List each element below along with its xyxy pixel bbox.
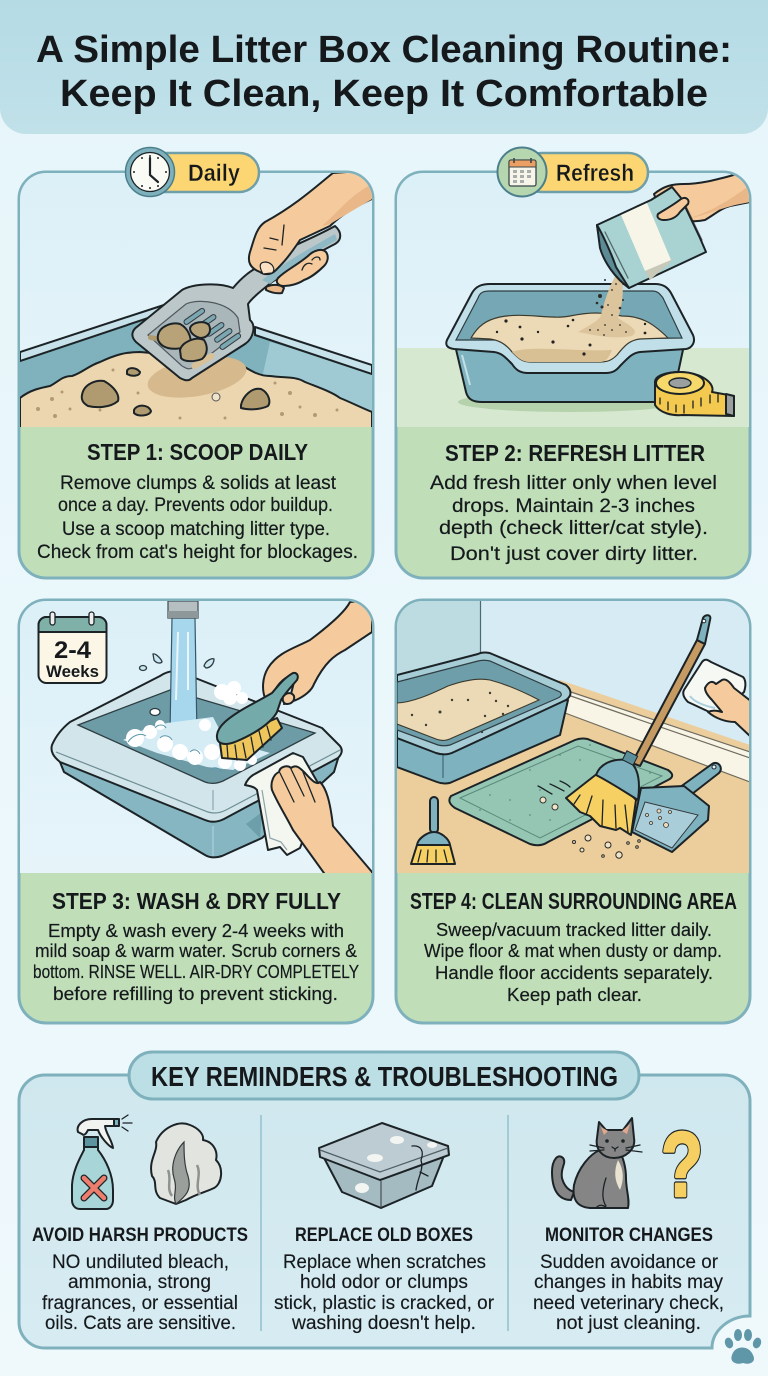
- illustration: scooping clumps from the box: [20, 170, 374, 428]
- title banner: [0, 0, 768, 134]
- badge: daily: [126, 148, 259, 196]
- panel: step 2 refresh litter: [396, 170, 750, 578]
- scoop: [132, 226, 340, 380]
- column: replace old boxes: Replace when scratches: [283, 1252, 486, 1273]
- litter box: [51, 671, 342, 857]
- step 1 text: STEP 1: SCOOP DAILY: [87, 439, 308, 465]
- title: Keep It Clean, Keep It Comfortable: [60, 73, 708, 115]
- step 3 text: [33, 888, 359, 1004]
- illustration: washing the box: [20, 600, 372, 880]
- column: avoid harsh products: NO undiluted bleach,: [52, 1252, 229, 1273]
- hand with brush: [217, 600, 372, 760]
- panel: step 1 scoop daily: [19, 170, 374, 578]
- step 4 text: Handle floor accidents separately.: [435, 963, 713, 983]
- icon: 2-4 weeks calendar: Weeks: [46, 663, 99, 681]
- column: avoid harsh products: [32, 1225, 248, 1334]
- litter box: [446, 284, 694, 402]
- column: replace old boxes: hold odor or clumps: [300, 1272, 468, 1293]
- soap foam: [123, 681, 270, 772]
- hand thumb: [657, 198, 689, 220]
- column: replace old boxes: [274, 1225, 495, 1334]
- column: monitor changes: need veterinary check,: [533, 1293, 724, 1314]
- badge: refresh: Refresh: [556, 160, 634, 187]
- step 2 text: STEP 2: REFRESH LITTER: [445, 440, 705, 466]
- hand pouring: [654, 170, 750, 221]
- column: avoid harsh products: AVOID HARSH PRODUCTS: [32, 1225, 248, 1246]
- badge: daily: Daily: [188, 160, 241, 187]
- step 4 text: Sweep/vacuum tracked litter daily.: [436, 920, 712, 940]
- title: A Simple Litter Box Cleaning Routine:: [36, 29, 732, 71]
- step 3 text: Empty & wash every 2-4 weeks with: [48, 921, 344, 941]
- step 2 text: Don't just cover dirty litter.: [450, 543, 698, 565]
- illustration: sweeping around the box: [397, 601, 752, 873]
- step 1 text: [37, 439, 358, 563]
- column: monitor changes: Sudden avoidance or: [540, 1252, 719, 1273]
- step 2 text: [430, 440, 717, 565]
- title: [36, 29, 732, 115]
- dustpan: [632, 763, 721, 852]
- broom: [566, 615, 710, 835]
- step 4 text: [410, 888, 737, 1005]
- icon: clock: [126, 148, 174, 196]
- falling litter: [578, 276, 635, 338]
- step 1 text: Check from cat's height for blockages.: [37, 541, 358, 563]
- column: monitor changes: changes in habits may: [534, 1272, 723, 1293]
- column: monitor changes: MONITOR CHANGES: [545, 1225, 713, 1246]
- step 1 text: Remove clumps & solids at least: [60, 472, 337, 494]
- small brush icon: [411, 797, 455, 864]
- panel: key reminders: [19, 1052, 750, 1348]
- faucet: [168, 601, 198, 618]
- icon: paw print: [723, 1329, 763, 1364]
- litter clumps: [82, 368, 269, 415]
- measuring tape: [655, 372, 734, 416]
- panel: step 4 clean surrounding area: [396, 600, 752, 1023]
- hand with cloth: [245, 753, 372, 880]
- step 4 text: Wipe floor & mat when dusty or damp.: [424, 941, 722, 961]
- section title pill: KEY REMINDERS & TROUBLESHOOTING: [151, 1061, 618, 1092]
- column: monitor changes: [533, 1225, 724, 1334]
- step 1 text: Use a scoop matching litter type.: [62, 518, 330, 540]
- hand holding scoop: [249, 170, 374, 293]
- step 2 text: depth (check litter/cat style).: [439, 517, 708, 539]
- column: avoid harsh products: ammonia, strong: [68, 1272, 211, 1293]
- step 1 text: once a day. Prevents odor buildup.: [58, 494, 333, 516]
- column: replace old boxes: stick, plastic is cracked, or: [274, 1293, 495, 1314]
- column: replace old boxes: washing doesn't help.: [291, 1313, 476, 1334]
- icon: calendar: [498, 148, 546, 196]
- panel: step 3 wash and dry: [19, 600, 373, 1023]
- column: avoid harsh products: fragrances, or essential: [42, 1293, 238, 1314]
- column: monitor changes: not just cleaning.: [556, 1313, 701, 1334]
- step 3 text: before refilling to prevent sticking.: [53, 984, 338, 1004]
- step 2 text: drops. Maintain 2-3 inches: [452, 495, 695, 517]
- icon: old cracked box: [319, 1123, 449, 1208]
- step 3 text: mild soap & warm water. Scrub corners &: [35, 941, 357, 961]
- column: replace old boxes: REPLACE OLD BOXES: [295, 1225, 473, 1246]
- icon: 2-4 weeks calendar: [38, 612, 106, 683]
- badge: refresh: [498, 148, 648, 196]
- floor debris: [572, 835, 640, 858]
- icon: 2-4 weeks calendar: 2-4: [54, 637, 92, 664]
- section title pill: [129, 1052, 639, 1099]
- icon: fumes cloud: [151, 1124, 221, 1204]
- water stream: [170, 618, 197, 737]
- icon: question mark: ?: [661, 1114, 703, 1216]
- litter box: [397, 652, 570, 784]
- water drops: [140, 654, 214, 716]
- step 4 text: Keep path clear.: [507, 985, 642, 1005]
- column: avoid harsh products: oils. Cats are sensitive.: [45, 1313, 236, 1334]
- baseboard: [565, 690, 750, 782]
- hand wiping wall: [683, 660, 752, 738]
- icon: gray cat: [552, 1118, 642, 1208]
- step 3 text: STEP 3: WASH & DRY FULLY: [52, 888, 341, 914]
- illustration: pouring litter into the box: [397, 170, 750, 427]
- icon: question mark: ?: [661, 1114, 703, 1216]
- litter mat: [449, 738, 672, 845]
- icon: spray bottle with red X: [72, 1115, 132, 1209]
- step 2 text: Add fresh litter only when level: [430, 472, 717, 494]
- litter bag: [597, 187, 706, 288]
- step 3 text: bottom. RINSE WELL. AIR-DRY COMPLETELY: [33, 962, 359, 982]
